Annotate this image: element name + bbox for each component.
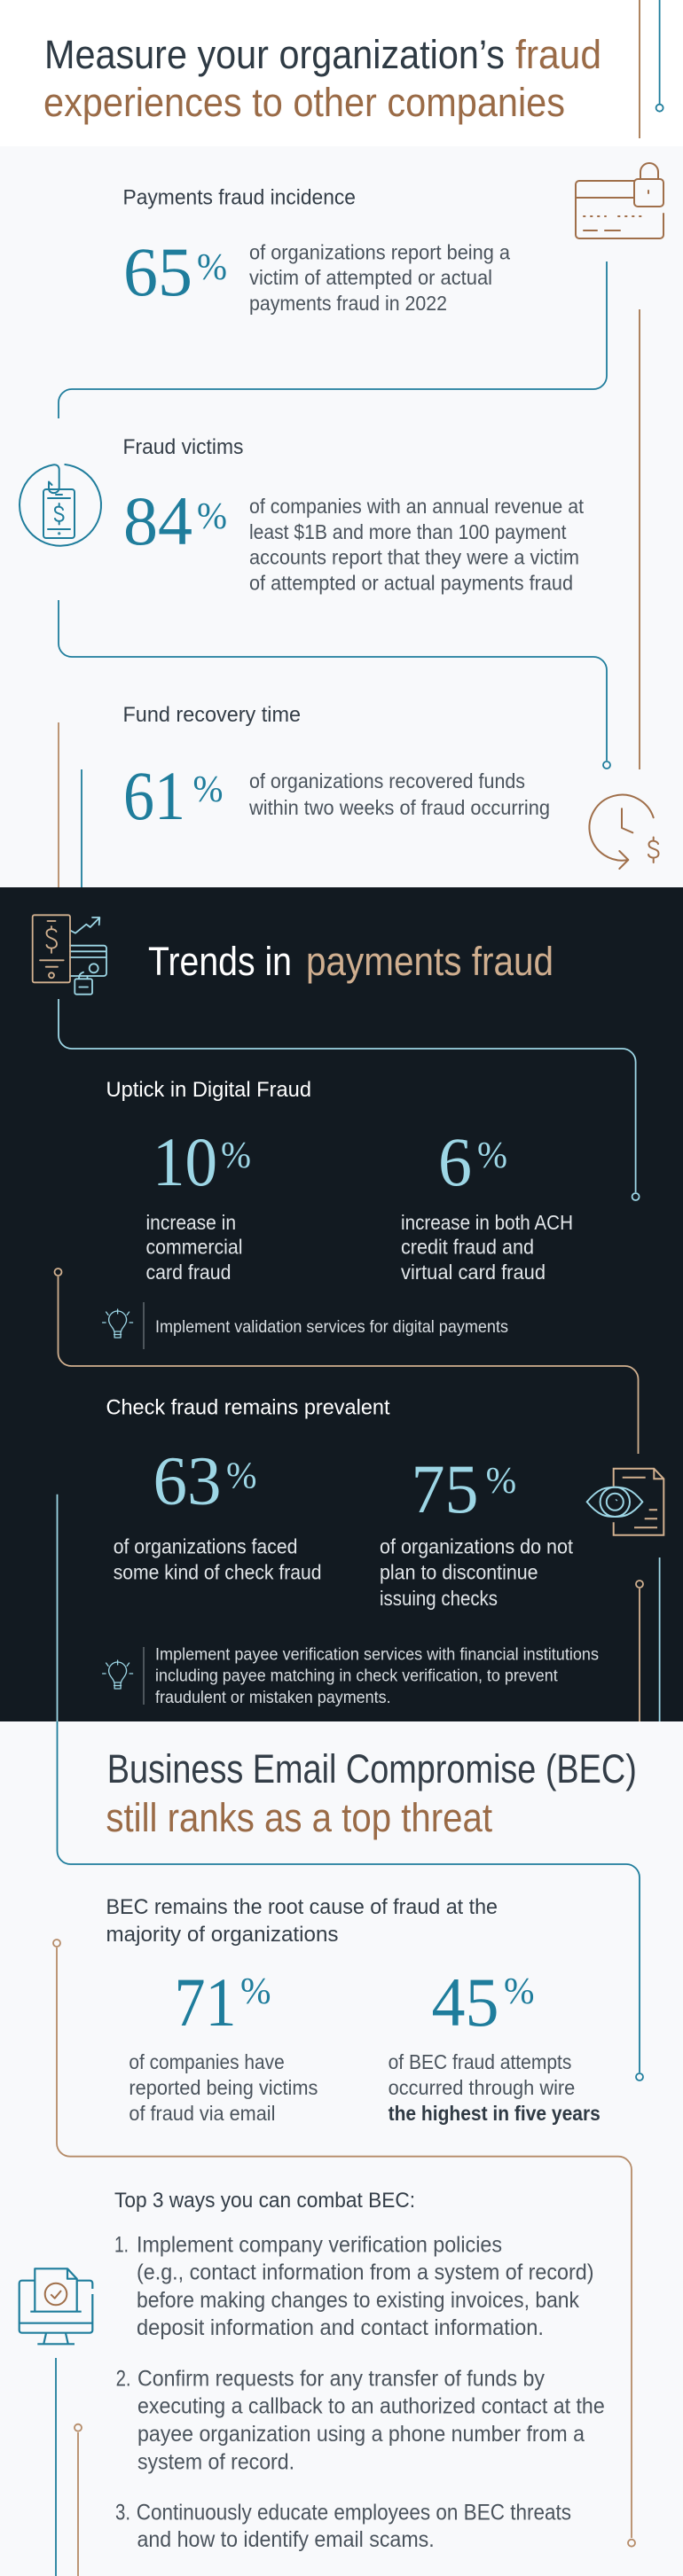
icon: phone, card, padlock and trend arrow: [33, 915, 106, 995]
stat: 10 percent: [145, 1123, 251, 1284]
list item 2: 2.: [116, 2367, 131, 2392]
stat: 6 percent: virtual card fraud: [401, 1261, 546, 1284]
heading: still ranks as a top threat: [106, 1795, 492, 1840]
description: [249, 241, 510, 315]
connector: teal line from victims to clock: [59, 600, 610, 769]
title: Measure your organization’s: [44, 32, 505, 77]
description: [249, 495, 585, 595]
callout: payee verification tip: including payee matching in check verification, to prevent: [155, 1667, 558, 1686]
icon: monitor with verified document: [20, 2268, 92, 2344]
stat: 10 percent: card fraud: [145, 1261, 231, 1284]
stat: 6 percent: [401, 1123, 573, 1284]
stat: 75 percent: of organizations do not: [380, 1535, 574, 1558]
stat: 45 percent: [389, 1963, 601, 2125]
stat: 6 percent: credit fraud and: [401, 1235, 534, 1258]
heading: Check fraud remains prevalent: [106, 1396, 390, 1420]
stat: 63 percent: of organizations faced: [114, 1535, 298, 1558]
list item 1: 1.: [114, 2233, 129, 2258]
title: [43, 32, 601, 125]
number: %: [197, 247, 227, 288]
list item 3: Continuously educate employees on BEC threats: [137, 2501, 571, 2525]
heading: payments fraud: [306, 939, 553, 984]
stat: fund recovery time: [122, 703, 550, 834]
number: [123, 757, 224, 834]
stat: 75 percent: plan to discontinue: [380, 1561, 538, 1584]
stat: 71 percent: 71: [174, 1963, 236, 2041]
stat: 45 percent: occurred through wire: [389, 2076, 575, 2099]
number: %: [193, 769, 224, 810]
list item 2: [116, 2367, 605, 2475]
heading: top 3 ways: Top 3 ways you can combat BEC:: [114, 2189, 415, 2213]
number: 84: [123, 482, 192, 559]
heading: Fraud victims: [122, 435, 243, 459]
connector: teal line: [57, 1721, 643, 2080]
stat: 75 percent: issuing checks: [380, 1587, 498, 1610]
panel: trends in payments fraud: [0, 887, 683, 1721]
stat: 10 percent: 10: [153, 1123, 217, 1200]
number: [123, 233, 227, 310]
list item 2: system of record.: [137, 2450, 294, 2475]
stat: 75 percent: %: [486, 1461, 516, 1502]
subheading: BEC remains the root cause of fraud at the: [106, 1895, 498, 1919]
heading: Fund recovery time: [122, 703, 301, 727]
stat: 71 percent: of fraud via email: [129, 2102, 275, 2125]
description: of companies with an annual revenue at: [249, 495, 585, 518]
heading: Trends in: [148, 939, 292, 984]
subsection: uptick in digital fraud: [103, 1078, 573, 1349]
description: payments fraud in 2022: [249, 292, 447, 315]
stat: 63 percent: [114, 1442, 321, 1584]
callout: payee verification tip: Implement payee verification services with financial institutions: [155, 1645, 599, 1665]
callout: payee verification tip: [144, 1645, 599, 1707]
stat: 63 percent: some kind of check fraud: [114, 1561, 321, 1584]
stat: 10 percent: commercial: [145, 1235, 243, 1258]
description: of organizations report being a: [249, 241, 510, 264]
list item 1: deposit information and contact information.: [137, 2315, 544, 2340]
connector: light blue line: [59, 999, 640, 1200]
description: accounts report that they were a victim: [249, 546, 579, 569]
number: %: [197, 496, 227, 537]
title: experiences to other companies: [43, 80, 565, 125]
title: fraud: [515, 32, 601, 77]
callout: payee verification tip: fraudulent or mistaken payments.: [155, 1688, 391, 1707]
connector: header teal line: [656, 0, 663, 112]
list item 1: [114, 2233, 594, 2340]
stat: 75 percent: 75: [412, 1450, 479, 1527]
stat: 71 percent: reported being victims: [129, 2076, 318, 2099]
stat: 45 percent: 45: [431, 1963, 499, 2041]
panel: business email compromise: [0, 1721, 683, 2576]
list item 1: Implement company verification policies: [137, 2233, 502, 2258]
number: [123, 482, 227, 559]
connector: long brown line: [639, 309, 640, 769]
list item 2: Confirm requests for any transfer of funds by: [137, 2367, 545, 2392]
list item 1: (e.g., contact information from a system of record): [137, 2260, 594, 2285]
subsection: check fraud: [103, 1396, 599, 1707]
stat: 63 percent: %: [226, 1456, 257, 1496]
description: [248, 769, 550, 819]
stat: 71 percent: [129, 1963, 318, 2125]
icon: credit card with padlock: [576, 163, 663, 238]
list item 3: [115, 2501, 571, 2552]
description: within two weeks of fraud occurring: [248, 796, 550, 819]
subheading: [106, 1895, 498, 1947]
description: victim of attempted or actual: [249, 266, 492, 289]
list item 3: 3.: [115, 2501, 130, 2525]
heading: Uptick in Digital Fraud: [106, 1078, 311, 1102]
icon: clock with dollar: [589, 795, 658, 869]
subheading: majority of organizations: [106, 1923, 339, 1947]
description: of organizations recovered funds: [249, 769, 525, 792]
stat: fraud victims: [122, 435, 585, 595]
icon: eye over document: [587, 1469, 663, 1535]
number: 65: [123, 233, 192, 310]
stat: 45 percent: of BEC fraud attempts: [389, 2050, 571, 2073]
panel: header: [0, 0, 683, 146]
heading: Payments fraud incidence: [122, 186, 356, 209]
connector: tan line: [55, 1268, 639, 1454]
stat: 45 percent: the highest in five years: [389, 2102, 601, 2125]
stat: 6 percent: 6: [438, 1123, 472, 1200]
description: least $1B and more than 100 payment: [249, 520, 567, 543]
list item 3: and how to identify email scams.: [137, 2527, 435, 2552]
connector: bottom lines: [56, 2358, 82, 2576]
panel: fraud statistics: [0, 146, 683, 887]
stat: 45 percent: %: [504, 1971, 534, 2012]
stat: payments fraud incidence: [122, 186, 510, 315]
stat: 63 percent: 63: [153, 1442, 222, 1519]
stat: 10 percent: %: [221, 1136, 251, 1176]
list item 2: executing a callback to an authorized contact at the: [137, 2394, 605, 2419]
number: 61: [123, 757, 185, 834]
stat: 75 percent: [380, 1450, 574, 1610]
list item 1: before making changes to existing invoices, bank: [137, 2288, 579, 2313]
heading: [106, 1746, 637, 1840]
description: of attempted or actual payments fraud: [249, 572, 573, 595]
stat: 10 percent: increase in: [145, 1211, 236, 1234]
connector: right lines leaving dark panel: [57, 1495, 660, 1721]
icon: light bulb: [103, 1660, 133, 1689]
connector: teal line from incidence to victims: [59, 262, 607, 418]
stat: 6 percent: increase in both ACH: [401, 1211, 573, 1234]
icon: light bulb: [103, 1309, 133, 1338]
stat: 6 percent: %: [477, 1136, 507, 1176]
connector: left lines entering dark panel: [59, 722, 82, 887]
stat: 71 percent: of companies have: [129, 2050, 285, 2073]
connector: brown line: [53, 1940, 635, 2547]
callout: digital payments tip: Implement validation services for digital payments: [155, 1317, 508, 1337]
heading: [148, 939, 553, 984]
connector: header brown line: [639, 0, 640, 138]
list item 2: payee organization using a phone number from a: [137, 2422, 585, 2447]
icon: phone on fishing hook: [20, 464, 101, 546]
stat: 71 percent: %: [240, 1971, 271, 2012]
